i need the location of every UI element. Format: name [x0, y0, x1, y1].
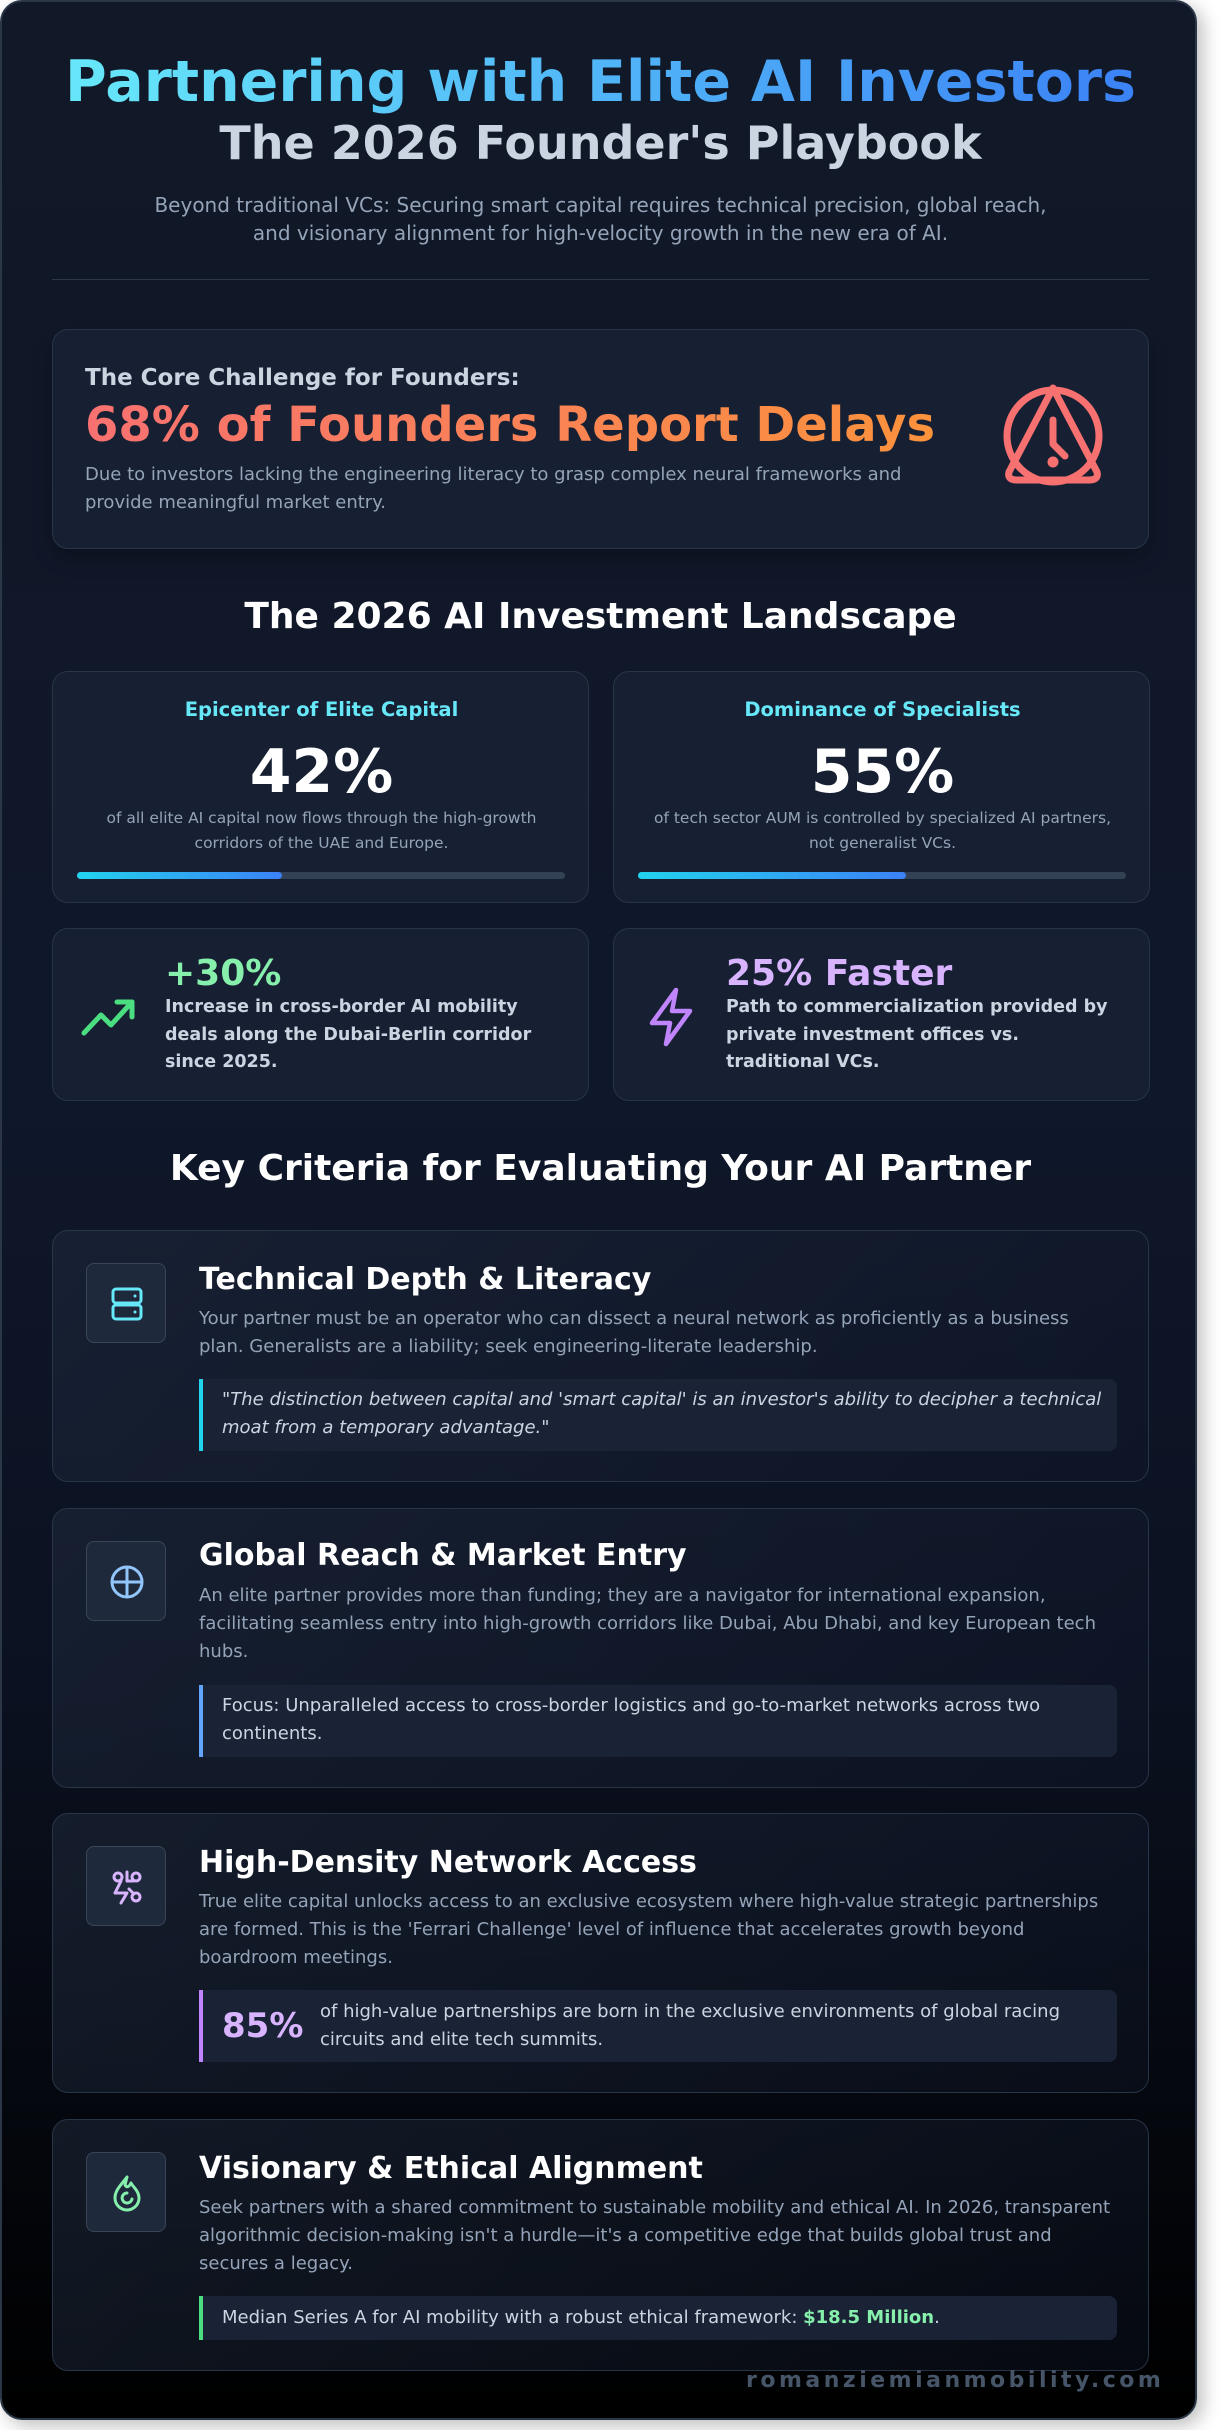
icon: network [86, 1846, 166, 1926]
label: Dominance of Specialists [744, 698, 1021, 721]
footer: website: romanziemianmobility.com [746, 2368, 1164, 2393]
funding note: Median Series A for AI mobility with a robust ethical framework: $18.5 Million. [222, 2307, 940, 2328]
panel: global reach [52, 1508, 1149, 1788]
progress bar [77, 872, 565, 879]
quote: "The distinction between capital and 'smart capital' is an investor's ability to decipher a technical moat from a temporary advantage." [222, 1389, 1101, 1438]
focus note: Focus: Unparalleled access to cross-border logistics and go-to-market networks across two continents. [222, 1695, 1040, 1744]
description: of all elite AI capital now flows through the high-growth corridors of the UAE and Europe. [106, 809, 537, 852]
title: Technical Depth & Literacy [199, 1262, 651, 1297]
description: Path to commercialization provided by private investment offices vs. traditional VCs. [726, 997, 1108, 1072]
stat card: 25% faster [613, 928, 1150, 1101]
challenge headline: 68% of Founders Report Delays [85, 397, 935, 453]
heading: landscape: The 2026 AI Investment Landscape [244, 596, 957, 637]
panel: network access [52, 1813, 1149, 2093]
subtitle: The 2026 Founder's Playbook [219, 116, 982, 170]
icon: alert [1004, 384, 1102, 486]
title: Visionary & Ethical Alignment [199, 2151, 703, 2186]
description: Increase in cross-border AI mobility deals along the Dubai-Berlin corridor since 2025. [165, 997, 531, 1072]
stat callout: 85% [199, 1990, 1117, 2062]
panel: ethical alignment [52, 2119, 1149, 2371]
challenge description: Due to investors lacking the engineering literacy to grasp complex neural frameworks and provide meaningful market entry. [85, 464, 902, 513]
focus note [199, 1685, 1117, 1757]
title: High-Density Network Access [199, 1845, 697, 1880]
panel: core challenge [52, 329, 1149, 549]
intro text: and visionary alignment for high-velocity growth in the new era of AI. [253, 221, 948, 245]
stat card: 55% [613, 671, 1150, 903]
stat card: +30% [52, 928, 589, 1101]
quote [199, 1379, 1117, 1451]
description: Your partner must be an operator who can dissect a neural network as proficiently as a business plan. Generalists are a liability; seek engineering-literate leadership. [199, 1308, 1069, 1357]
number: 42% [250, 737, 393, 807]
icon: trending up [82, 1000, 134, 1036]
description: of tech sector AUM is controlled by specialized AI partners, not generalist VCs. [654, 809, 1111, 852]
description: Seek partners with a shared commitment to sustainable mobility and ethical AI. In 2026, transparent algorithmic decision-making isn't a hurdle—it's a competitive edge that builds global trust and secures a legacy. [199, 2197, 1110, 2274]
label: Epicenter of Elite Capital [185, 698, 458, 721]
description: True elite capital unlocks access to an exclusive ecosystem where high-value strategic partnerships are formed. This is the 'Ferrari Challenge' level of influence that accelerates growth beyond boardroom meetings. [199, 1891, 1098, 1968]
callout text: of high-value partnerships are born in the exclusive environments of global racing circuits and elite tech summits. [320, 2001, 1060, 2050]
title: Global Reach & Market Entry [199, 1538, 687, 1573]
value: 85% [222, 2006, 303, 2046]
icon: server [86, 1263, 166, 1343]
intro text: Beyond traditional VCs: Securing smart capital requires technical precision, global reach, [154, 193, 1047, 217]
stat card: 42% [52, 671, 589, 903]
funding note [199, 2296, 1117, 2340]
value: +30% [165, 953, 281, 994]
challenge label: The Core Challenge for Founders: [85, 365, 520, 391]
description: An elite partner provides more than funding; they are a navigator for international expansion, facilitating seamless entry into high-growth corridors like Dubai, Abu Dhabi, and key European tech hubs. [199, 1585, 1096, 1662]
progress bar [638, 872, 1126, 879]
heading: key criteria: Key Criteria for Evaluating Your AI Partner [170, 1148, 1031, 1189]
intro text [154, 193, 1047, 245]
panel: technical depth [52, 1230, 1149, 1482]
icon: lightning [650, 988, 692, 1046]
icon: flame [86, 2152, 166, 2232]
number: 55% [811, 737, 954, 807]
title: Partnering with Elite AI Investors [65, 49, 1136, 115]
value: 25% Faster [726, 953, 952, 994]
icon: globe [86, 1541, 166, 1621]
